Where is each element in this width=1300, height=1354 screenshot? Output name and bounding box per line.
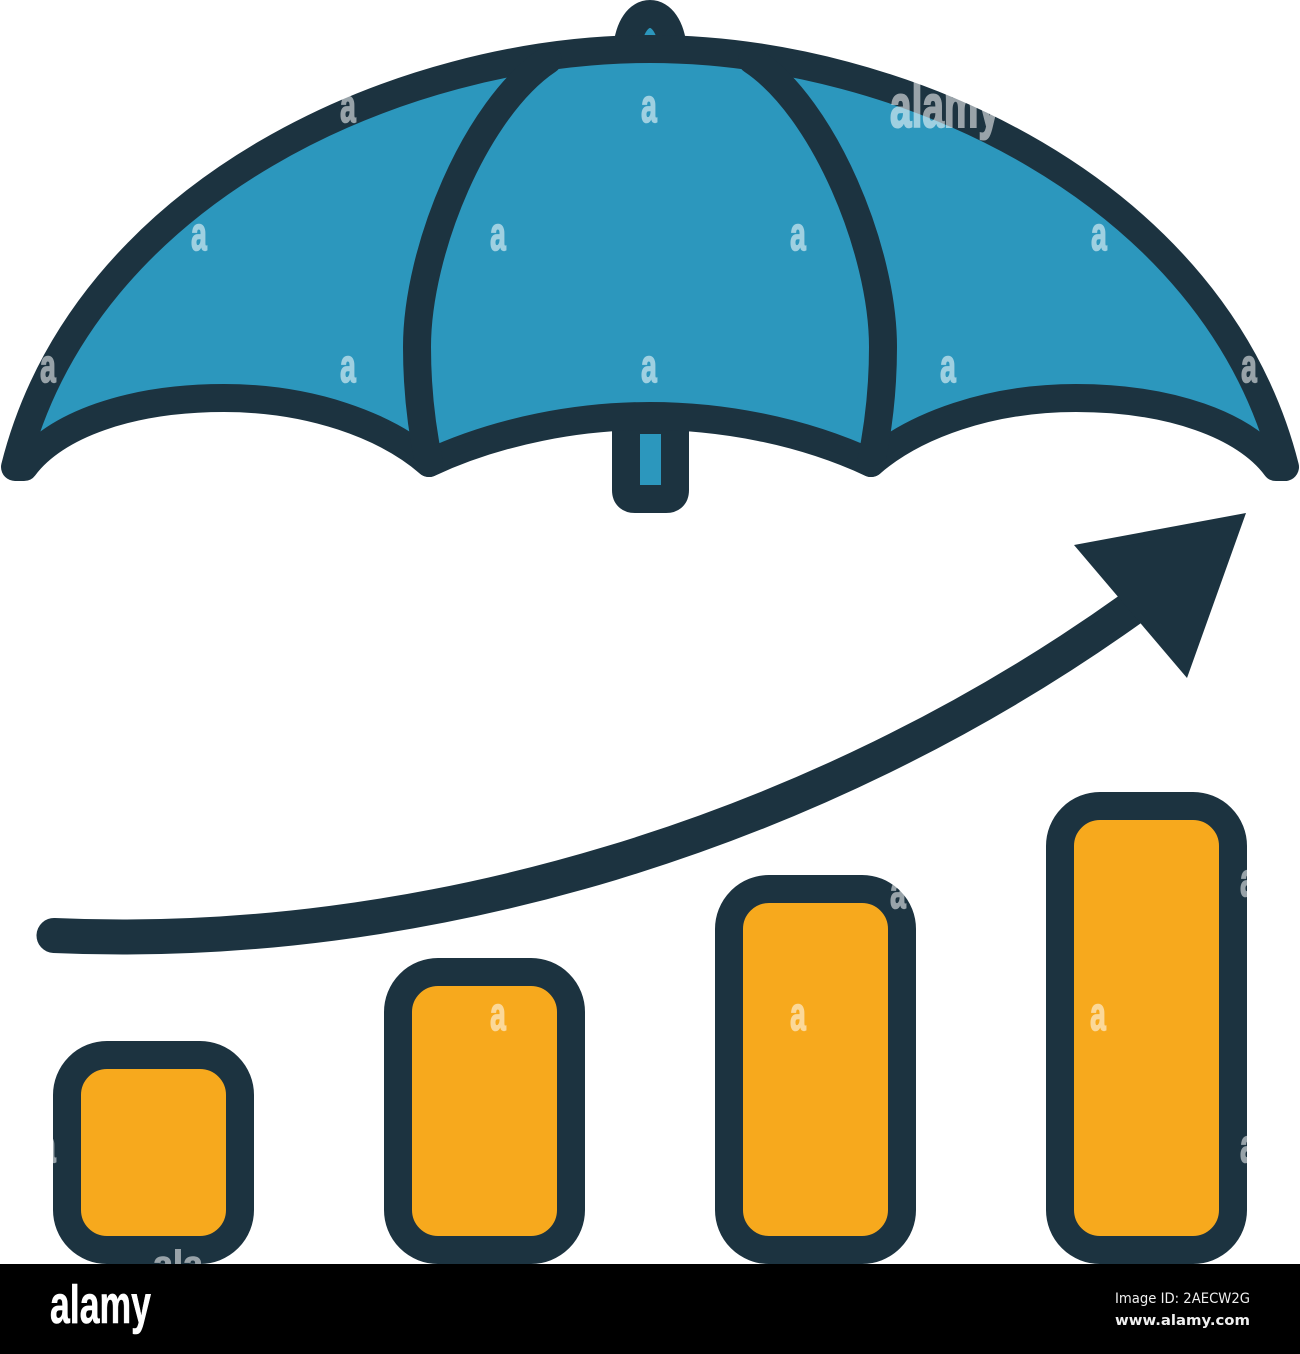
footer bar xyxy=(0,1264,1300,1354)
image id: Image ID: 2AECW2G xyxy=(1115,1291,1250,1307)
bar chart xyxy=(67,806,1233,1250)
umbrella top knob xyxy=(627,14,673,50)
watermark: repeated small letters: a xyxy=(890,867,906,919)
watermark: repeated small letters: a xyxy=(40,341,56,393)
bar 3 xyxy=(729,889,902,1250)
watermark: repeated small letters: a xyxy=(1240,1121,1256,1173)
footer background xyxy=(0,1264,1300,1354)
watermark: repeated small letters: a xyxy=(340,81,356,133)
watermark: repeated small letters: a xyxy=(940,341,956,393)
umbrella handle stub xyxy=(626,420,675,499)
watermark: repeated small letters: a xyxy=(790,209,806,261)
bar 2 xyxy=(398,972,571,1250)
watermark: lower fragment, cut by footer: ala xyxy=(153,1243,204,1284)
growth arrow xyxy=(54,513,1246,937)
watermark: repeated small letters: a xyxy=(40,1121,56,1173)
watermark: repeated small letters: a xyxy=(340,341,356,393)
watermark: repeated small letters: a xyxy=(1241,341,1257,393)
umbrella right rib xyxy=(752,60,883,463)
footer logo: alamy xyxy=(50,1275,151,1335)
watermark: repeated small letters: a xyxy=(641,341,657,393)
watermark: repeated small letters: a xyxy=(191,209,207,261)
umbrella canopy xyxy=(15,49,1285,467)
watermark: repeated small letters: a xyxy=(641,81,657,133)
arrow shaft xyxy=(54,608,1132,937)
umbrella left rib xyxy=(417,60,548,463)
arrow head xyxy=(1074,513,1246,678)
watermark: alamy top: alamy xyxy=(890,73,1000,140)
bar 1 xyxy=(67,1055,240,1250)
bar 4 xyxy=(1060,806,1233,1250)
watermark: repeated small letters: a xyxy=(1091,209,1107,261)
watermark: repeated small letters xyxy=(40,81,1257,1173)
website: www.alamy.com xyxy=(1115,1313,1250,1329)
watermark: repeated small letters: a xyxy=(490,209,506,261)
watermark: repeated small letters: a xyxy=(1240,855,1256,907)
watermark: repeated small letters: a xyxy=(790,989,806,1041)
watermark: repeated small letters: a xyxy=(490,989,506,1041)
icon: umbrella xyxy=(15,14,1285,499)
watermark: repeated small letters: a xyxy=(1090,989,1106,1041)
